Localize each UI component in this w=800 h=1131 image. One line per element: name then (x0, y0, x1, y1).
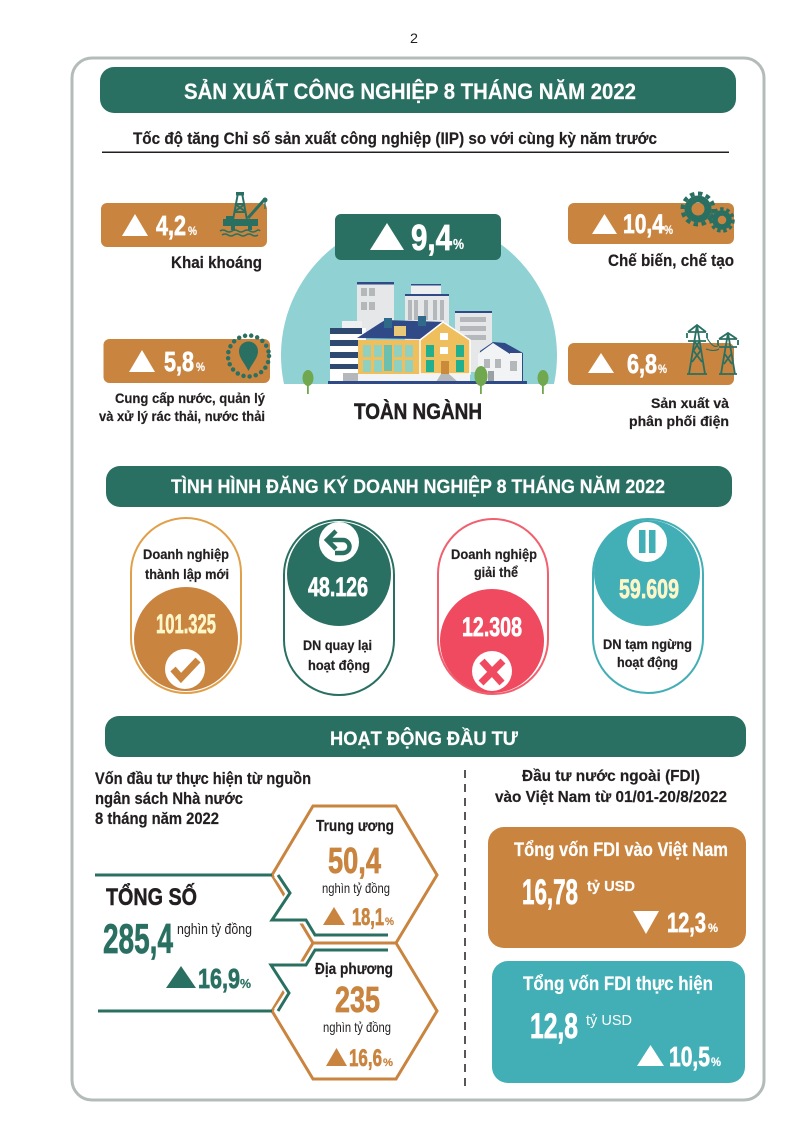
heading: industrial production: SẢN XUẤT CÔNG NGHIỆP 8 THÁNG NĂM 2022 (184, 79, 636, 104)
connector: lower bracket (98, 950, 388, 1011)
panel: new enterprises: Doanh nghiệp (143, 546, 229, 562)
total values: % (240, 976, 251, 991)
buildings (328, 282, 527, 384)
page number: 2 (410, 30, 418, 46)
icon: gears (682, 194, 733, 231)
panel: returning enterprises (284, 520, 394, 695)
label: electricity (629, 395, 729, 429)
panel: returning enterprises: hoạt động (308, 657, 370, 673)
label: mining: Khai khoáng (171, 254, 262, 272)
panel: realized FDI: Tổng vốn FDI thực hiện (523, 974, 713, 995)
heading: investment (105, 716, 746, 757)
heading: FDI: Đầu tư nước ngoài (FDI) (522, 768, 700, 785)
panel: water and waste: 5,8 (164, 346, 194, 377)
icon: return arrow (319, 522, 359, 562)
local values: Địa phương (315, 961, 393, 978)
panel: returning enterprises: DN quay lại (303, 637, 372, 653)
label: electricity: Sản xuất và (651, 395, 729, 411)
total values: nghìn tỷ đồng (177, 921, 252, 938)
icon: check mark (165, 649, 205, 689)
heading: business registration: TÌNH HÌNH ĐĂNG KÝ DOANH NGHIỆP 8 THÁNG NĂM 2022 (171, 476, 665, 498)
local values: % (383, 1057, 393, 1069)
panel: suspended enterprises: 59.609 (619, 574, 679, 604)
local values: 16,6 (349, 1045, 382, 1072)
panel: electricity: 6,8 (627, 349, 657, 379)
total values: 285,4 (103, 915, 173, 962)
label: electricity: phân phối điện (629, 413, 729, 429)
panel: manufacturing: % (664, 223, 673, 237)
heading: state budget capital: ngân sách Nhà nước (95, 790, 243, 808)
panel: total FDI: tỷ USD (587, 878, 635, 895)
heading: state budget capital (95, 770, 311, 828)
panel: total FDI: % (708, 921, 718, 935)
trees (302, 366, 548, 394)
panel: realized FDI: 12,8 (530, 1007, 578, 1046)
heading: business registration (106, 466, 732, 507)
badge: whole industry value (335, 214, 501, 260)
local values: nghìn tỷ đồng (323, 1019, 391, 1035)
panel: realized FDI: tỷ USD (586, 1012, 632, 1029)
heading: state budget capital: Vốn đầu tư thực hiện từ nguồn (95, 770, 311, 788)
panel: electricity (568, 325, 738, 429)
hexagon: central (272, 806, 437, 943)
heading: FDI: vào Việt Nam từ 01/01-20/8/2022 (495, 789, 727, 806)
label: water and waste (99, 390, 265, 424)
central values: % (385, 916, 394, 928)
subtitle: Tốc độ tăng Chỉ số sản xuất công nghiệp (IIP) so với cùng kỳ năm trước (133, 129, 657, 148)
central values: 18,1 (352, 904, 384, 931)
panel: mining (101, 192, 268, 272)
icon: cross (472, 651, 512, 691)
heading: industrial production (100, 67, 736, 113)
outer frame (72, 58, 764, 1100)
panel: manufacturing (568, 194, 734, 270)
panel: dissolved enterprises: 12.308 (462, 612, 522, 642)
total values: 16,9 (198, 963, 240, 994)
panel: suspended enterprises: hoạt động (617, 654, 678, 670)
panel: mining: 4,2 (156, 210, 186, 241)
heading: state budget capital: 8 tháng năm 2022 (95, 810, 219, 828)
panel: dissolved enterprises (438, 519, 548, 694)
panel: whole industry illustration (281, 214, 557, 424)
panel: suspended enterprises (593, 519, 703, 693)
connector: upper bracket (95, 875, 388, 935)
panel: electricity: % (658, 362, 667, 376)
panel: total FDI (488, 827, 746, 948)
panel: water and waste (99, 336, 270, 424)
total values (103, 883, 252, 994)
panel: new enterprises: thành lập mới (145, 566, 229, 582)
semicircle background (281, 217, 557, 384)
central values (316, 818, 394, 931)
panel: total FDI: Tổng vốn FDI vào Việt Nam (514, 840, 728, 861)
divider (464, 770, 466, 1092)
panel: new enterprises (131, 518, 241, 693)
panel: dissolved enterprises: giải thể (474, 564, 518, 580)
central values: 50,4 (328, 840, 381, 881)
heading: FDI (495, 768, 727, 806)
panel: dissolved enterprises: Doanh nghiệp (451, 546, 537, 562)
icon: pause (627, 522, 667, 562)
panel: total FDI: 12,3 (667, 907, 706, 938)
panel: returning enterprises: 48.126 (308, 572, 368, 602)
total values: TỔNG SỐ (106, 883, 197, 911)
panel: manufacturing: 10,4 (623, 209, 664, 239)
label: water and waste: và xử lý rác thải, nước thải (99, 408, 265, 424)
panel: water and waste: % (196, 360, 205, 374)
local values (315, 961, 393, 1072)
panel: total FDI: 16,78 (522, 873, 578, 912)
panel: new enterprises: 101.325 (156, 609, 216, 639)
badge: whole industry value: 9,4 (411, 217, 452, 258)
badge: whole industry value: % (453, 236, 464, 253)
hexagon: local (272, 943, 437, 1079)
label: whole industry: TOÀN NGÀNH (354, 399, 482, 424)
central values: nghìn tỷ đồng (322, 880, 390, 896)
icon: location pin in dotted ring (228, 336, 269, 376)
panel: realized FDI (492, 961, 745, 1083)
icon: oil rig (220, 192, 268, 236)
icon: power pylons (687, 325, 738, 374)
heading: investment: HOẠT ĐỘNG ĐẦU TƯ (330, 728, 518, 750)
label: manufacturing: Chế biến, chế tạo (608, 252, 734, 270)
panel: realized FDI: % (711, 1055, 721, 1069)
panel: realized FDI: 10,5 (669, 1041, 710, 1072)
panel: suspended enterprises: DN tạm ngừng (603, 636, 692, 652)
label: water and waste: Cung cấp nước, quản lý (115, 390, 265, 406)
panel: mining: % (188, 224, 197, 238)
central values: Trung ương (316, 818, 394, 835)
local values: 235 (335, 979, 380, 1020)
